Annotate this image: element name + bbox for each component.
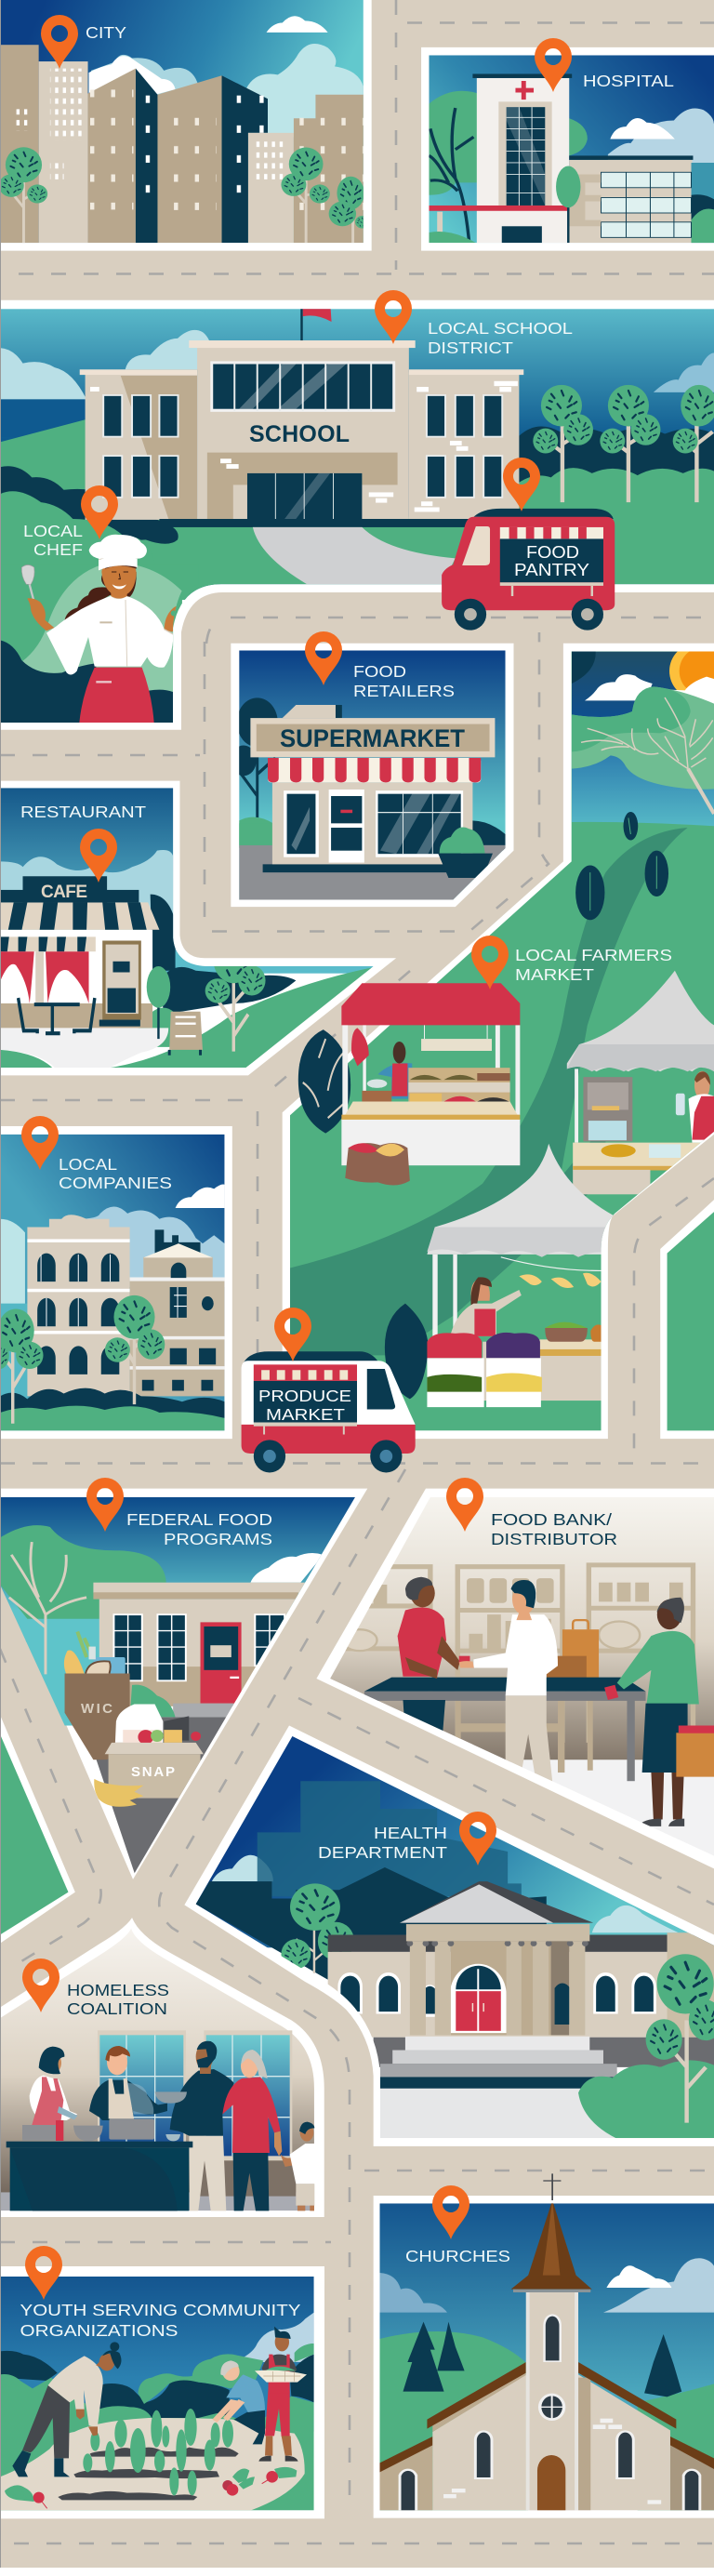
panel: city — [0, 0, 372, 251]
truck: food pantry — [442, 458, 615, 631]
label: local chef: LOCAL — [23, 522, 83, 540]
truck body — [442, 509, 615, 631]
label: restaurant: RESTAURANT — [20, 803, 146, 821]
panel: local school district — [0, 290, 714, 730]
pin: restaurant — [80, 829, 117, 883]
label: health department: HEALTH — [374, 1824, 447, 1842]
label: cafe sign: CAFE — [41, 883, 87, 902]
cafe scene — [0, 781, 396, 1075]
label: produce market: PRODUCE — [258, 1387, 351, 1405]
label: food bank distributor: DISTRIBUTOR — [491, 1530, 617, 1548]
panel: youth serving community organizations — [0, 2246, 324, 2518]
label: youth serving community organizations: YOUTH SERVING COMMUNITY — [20, 2301, 301, 2319]
label: local companies: LOCAL — [59, 1155, 117, 1174]
pin: food bank — [446, 1478, 483, 1532]
thin left page edge — [0, 0, 1, 2568]
label: federal food programs: PROGRAMS — [164, 1530, 272, 1548]
volunteers and serving table — [7, 2030, 314, 2211]
pin: school — [375, 290, 412, 344]
panel: green lot on left road — [0, 1715, 75, 1944]
panel: health department — [184, 1726, 714, 2146]
pin: homeless coalition — [22, 1959, 60, 2012]
pin: youth — [25, 2246, 62, 2300]
label: federal food programs: FEDERAL FOOD — [126, 1510, 272, 1529]
panel: local farmers market — [283, 644, 714, 1439]
label: snap box: SNAP — [131, 1764, 175, 1780]
label: food retailers: FOOD — [353, 662, 406, 681]
label: youth serving community organizations: ORGANIZATIONS — [20, 2321, 178, 2340]
panel: churches — [374, 2173, 714, 2518]
pin: food pantry — [503, 458, 540, 511]
label: local companies: COMPANIES — [59, 1174, 172, 1192]
federal programs scene — [0, 1489, 367, 1879]
pin: produce market — [274, 1308, 311, 1361]
panel: green lot beside road — [660, 1200, 714, 1439]
homeless coalition backdrop — [0, 1918, 324, 2217]
panel: food bank distributor — [316, 1478, 714, 1868]
label: produce market: MARKET — [266, 1405, 345, 1424]
chef illustration — [1, 534, 182, 723]
panel: local chef — [0, 485, 198, 725]
city scene — [0, 0, 372, 251]
label: local school district: LOCAL SCHOOL — [428, 319, 573, 338]
label: local school district: DISTRICT — [428, 339, 513, 357]
pin: health department — [459, 1812, 496, 1866]
panel: federal food programs — [0, 1478, 367, 1879]
garden scene — [0, 2266, 324, 2518]
school scene — [0, 294, 714, 730]
health department scene — [184, 1726, 714, 2146]
bottom white margin — [0, 2568, 714, 2576]
label: hospital: HOSPITAL — [583, 72, 674, 90]
pin: city — [41, 15, 78, 69]
label: food pantry: PANTRY — [514, 560, 589, 579]
panel: homeless coalition — [0, 1918, 324, 2217]
supermarket scene — [231, 644, 513, 907]
pin: hospital — [535, 38, 572, 92]
truck body — [242, 1351, 416, 1473]
pin: churches — [432, 2185, 469, 2239]
farmers market scene — [283, 644, 714, 1439]
label: food retailers: RETAILERS — [353, 682, 455, 700]
pin: food retailers — [305, 631, 342, 685]
red market stall — [341, 983, 520, 1186]
truck: produce market — [242, 1308, 416, 1473]
panel: hospital — [421, 38, 714, 251]
panel: local companies — [0, 1116, 232, 1439]
panel: food retailers — [231, 631, 513, 907]
pin: federal — [86, 1478, 124, 1532]
label: supermarket sign: SUPERMARKET — [280, 724, 465, 752]
sky, sun, hills and bare tree — [572, 651, 714, 826]
label: homeless coalition: COALITION — [67, 1999, 167, 2018]
pin: chef — [81, 485, 118, 539]
label: churches: CHURCHES — [405, 2247, 510, 2265]
label: school sign: SCHOOL — [249, 421, 350, 447]
label: food pantry: FOOD — [526, 542, 579, 562]
label: wic bag: WIC — [81, 1701, 112, 1717]
label: homeless coalition: HOMELESS — [67, 1981, 169, 1999]
pin: companies — [21, 1116, 59, 1170]
label: food bank distributor: FOOD BANK/ — [491, 1510, 612, 1529]
church scene — [374, 2173, 714, 2518]
companies scene — [0, 1126, 232, 1439]
label: health department: DEPARTMENT — [318, 1843, 447, 1862]
label: city: CITY — [86, 23, 126, 42]
large leaf bush overlapping road — [298, 1029, 350, 1134]
panel: restaurant — [0, 781, 396, 1075]
label: local farmers market: LOCAL FARMERS — [515, 946, 672, 964]
food bank scene — [316, 1489, 714, 1868]
hospital scene — [421, 47, 714, 251]
pin: farmers market — [471, 936, 509, 989]
label: local farmers market: MARKET — [515, 965, 594, 984]
label: local chef: CHEF — [33, 540, 83, 559]
